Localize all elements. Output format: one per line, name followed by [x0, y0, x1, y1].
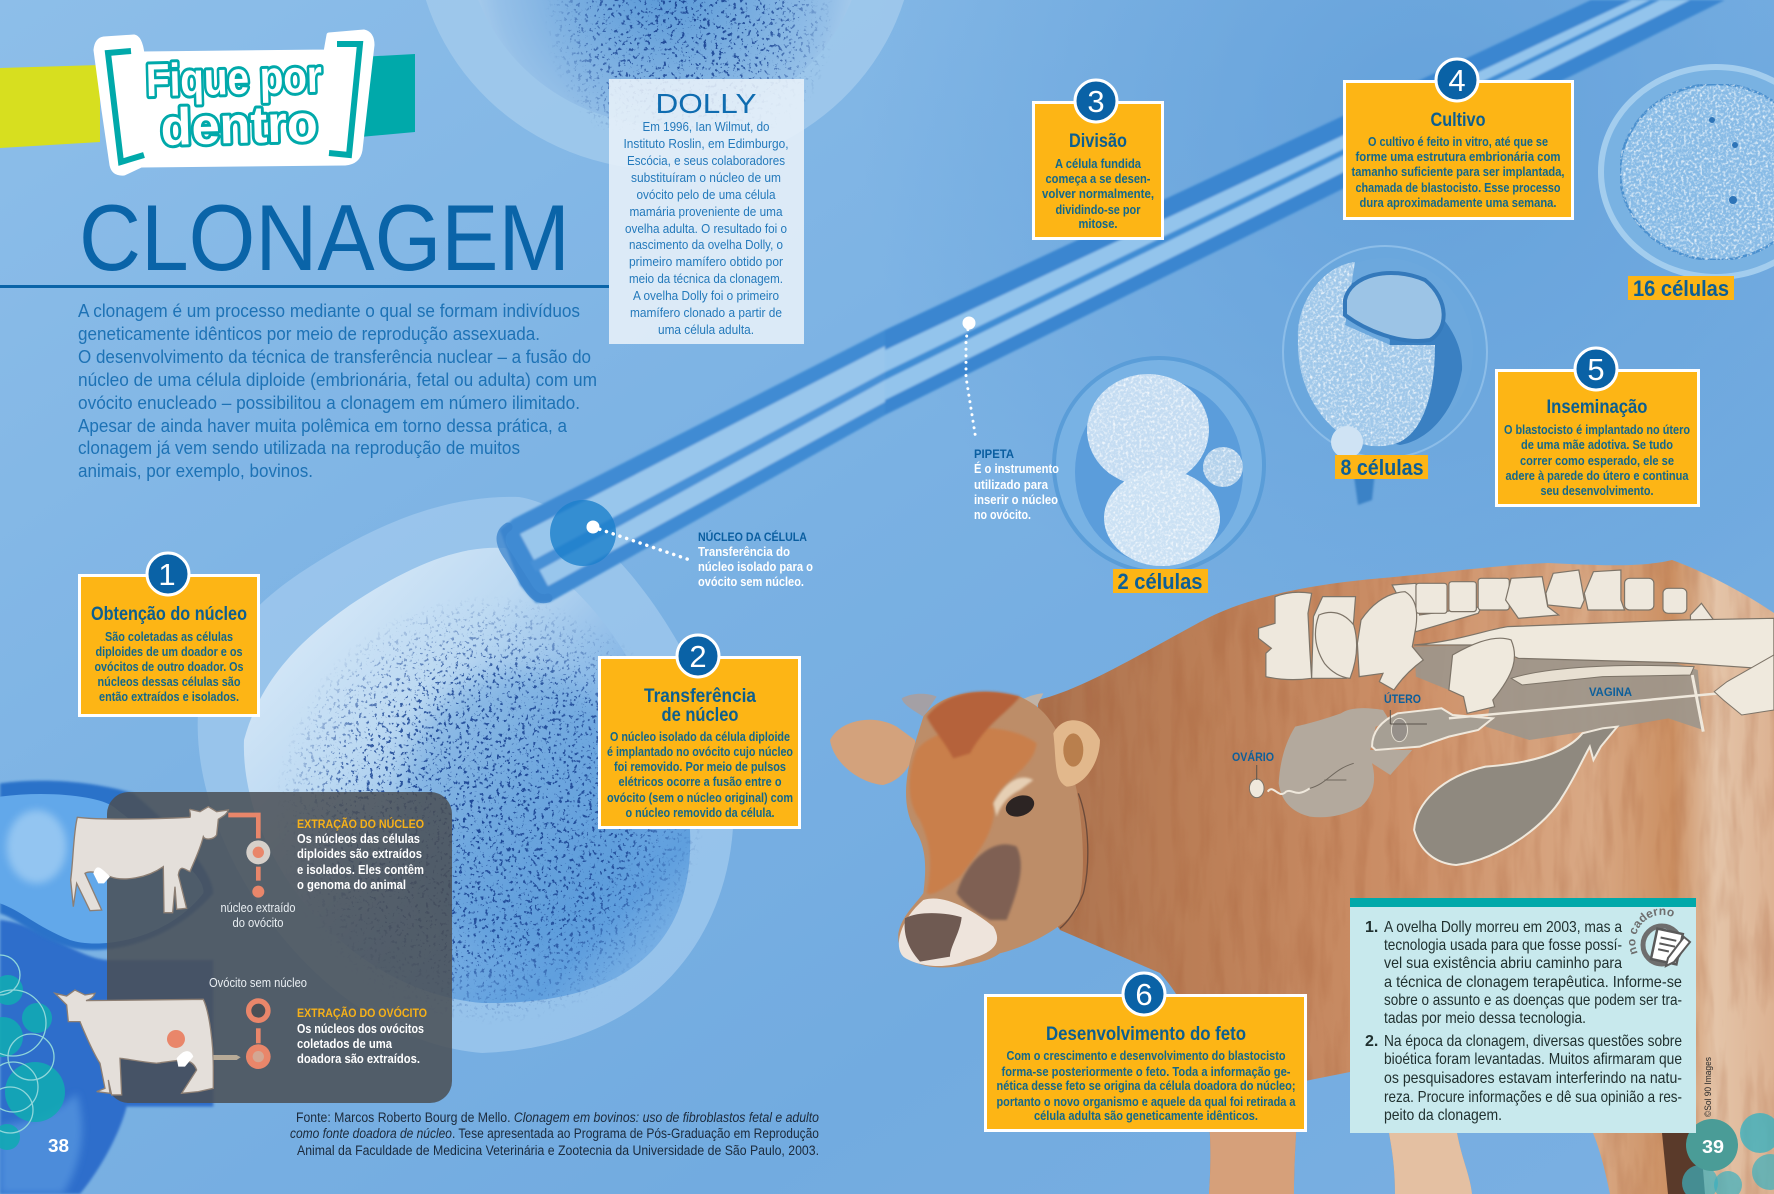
source text: Animal da Faculdade de Medicina Veterinária e Zootecnia da Universidade de São Paulo, 2003. — [297, 1143, 819, 1158]
panel: step 3: 3 — [1087, 84, 1105, 119]
text: extração do núcleo: e isolados. Eles contêm — [297, 862, 424, 877]
question 2: Na época da clonagem, diversas questões sobre — [1384, 1033, 1682, 1050]
cell: 16 células — [1601, 67, 1774, 301]
panel: step 6: portanto o novo organismo e aquele da qual foi retirada a — [996, 1094, 1296, 1109]
callout: núcleo da célula: ovócito sem núcleo. — [698, 574, 804, 589]
photo credit: ©Sol 90 Images — [1703, 1057, 1713, 1117]
panel: Dolly: Escócia, e seus colaboradores — [627, 153, 785, 168]
panel: step 1: núcleos dessas células são — [98, 674, 241, 689]
question 2: bioética foram levantadas. Muitos afirmaram que — [1384, 1051, 1682, 1068]
text: extração do ovócito: coletados de uma — [297, 1036, 393, 1051]
panel: step 2: o núcleo removido da célula. — [626, 805, 774, 820]
cell: 8 células — [1283, 246, 1487, 505]
panel: step 2: ovócito (sem o núcleo original) com — [607, 790, 793, 805]
panel: step 4: chamada de blastocisto. Esse processo — [1356, 180, 1561, 195]
panel: Dolly: primeiro mamífero obtido por — [629, 254, 784, 269]
cow head — [830, 691, 1100, 968]
panel: Dolly: meio da técnica da clonagem. — [629, 271, 783, 286]
panel: step 1: então extraídos e isolados. — [99, 689, 239, 704]
intro text: ovócito enucleado – possibilitou a clonagem em número ilimitado. — [78, 393, 580, 413]
cell: 8 células: 8 células — [1340, 455, 1424, 480]
anatomy labels: OVÁRIO — [1232, 749, 1274, 764]
panel: step 2: de núcleo — [662, 705, 738, 726]
panel: no caderno — [1350, 898, 1696, 1133]
panel: extraction diagram: do ovócito — [232, 916, 284, 930]
intro text: núcleo de uma célula diploide (embrionária, fetal ou adulta) com um — [78, 370, 597, 390]
panel: Dolly: Em 1996, Ian Wilmut, do — [642, 119, 770, 134]
panel: step 5 — [1496, 348, 1698, 506]
callout: pipeta: É o instrumento — [974, 461, 1059, 476]
panel: step 1 — [80, 553, 258, 716]
labels: núcleo extraído — [220, 901, 296, 915]
cow body — [1030, 555, 1774, 1194]
panel: step 2: Transferência — [644, 686, 756, 707]
callout: núcleo da célula — [586, 520, 813, 589]
insemination rod — [1449, 692, 1738, 718]
background: upper egg cell — [415, 0, 915, 170]
panel: step 3: Divisão — [1069, 131, 1127, 152]
panel: step 2 — [600, 635, 800, 828]
panel: step 4 — [1344, 59, 1572, 218]
panel: step 3: mitose. — [1078, 216, 1118, 231]
panel: Dolly: mamária proveniente de uma — [630, 204, 783, 219]
illustration: oocyte donor cow — [55, 990, 271, 1095]
decorative circles and page number 39: 39 — [1702, 1137, 1724, 1157]
bones — [1259, 570, 1716, 690]
callout: pipeta — [962, 316, 1059, 522]
background: blue blob bottom left — [0, 781, 213, 1194]
question 2: os pesquisadores estavam interferindo na natu- — [1384, 1070, 1682, 1087]
title rule — [0, 285, 609, 288]
intro text: A clonagem é um processo mediante o qual se formam indivíduos — [78, 301, 580, 321]
panel: step 3: dividindo-se por — [1056, 202, 1140, 217]
intro text: geneticamente idênticos por meio de reprodução assexuada. — [78, 324, 540, 344]
text: extração do ovócito: Os núcleos dos ovócitos — [297, 1021, 424, 1036]
panel: step 5: de uma mãe adotiva. Se tudo — [1521, 437, 1673, 452]
illustration: donor cow and nucleus extraction — [71, 807, 270, 913]
panel: step 4: forme uma estrutura embrionária com — [1356, 149, 1560, 164]
text: extração do núcleo: o genoma do animal — [297, 877, 406, 892]
cell: 2 células — [1054, 358, 1264, 594]
panel: step 5: 5 — [1587, 352, 1605, 387]
panel: step 6: forma-se posteriormente o feto. Toda a informação ge- — [1002, 1064, 1290, 1079]
panel: step 3: começa a se desen- — [1046, 171, 1150, 186]
panel: extraction diagram — [55, 792, 452, 1103]
question 1: sobre o assunto e as doenças que podem ser tra- — [1384, 992, 1682, 1009]
text: extração do núcleo: diploides são extraídos — [297, 846, 422, 861]
panel: Dolly: nascimento da ovelha Dolly, o — [629, 237, 783, 252]
nucleus in pipette — [550, 500, 616, 566]
callout: pipeta: inserir o núcleo — [974, 492, 1058, 507]
question 2: 2. — [1365, 1033, 1378, 1050]
question 1: tadas por meio dessa tecnologia. — [1384, 1010, 1586, 1027]
uterus — [1279, 708, 1412, 817]
question 1: a técnica de clonagem terapêutica. Informe-se — [1384, 974, 1682, 991]
arm and hand — [1414, 618, 1774, 713]
intro text: Apesar de ainda haver muita polêmica em torno dessa prática, a — [78, 416, 568, 436]
callout: pipeta: PIPETA — [974, 447, 1014, 461]
question 1: A ovelha Dolly morreu em 2003, mas a — [1384, 919, 1622, 936]
panel: Dolly — [609, 79, 804, 344]
panel: step 1: São coletadas as células — [105, 629, 233, 644]
panel: step 5: Inseminação — [1546, 397, 1648, 418]
panel: step 4: dura aproximadamente uma semana. — [1360, 195, 1556, 210]
panel: step 5: correr como esperado, ele se — [1520, 453, 1674, 468]
anatomy labels — [1232, 685, 1632, 764]
question 2: reza. Procure informações e dê sua opinião a res- — [1384, 1089, 1682, 1106]
source text: Fonte: Marcos Roberto Bourg de Mello. Clonagem em bovinos: uso de fibroblastos fetal e adulto — [296, 1110, 819, 1125]
text: extração do ovócito — [297, 1005, 427, 1066]
title banner: Fique por dentro — [0, 32, 415, 173]
icon: notebook: no caderno — [1629, 908, 1674, 954]
panel: Dolly: uma célula adulta. — [658, 322, 754, 337]
panel: Dolly: A ovelha Dolly foi o primeiro — [633, 288, 779, 303]
panel: Dolly: mamífero clonado a partir de — [630, 305, 782, 320]
panel: step 4: O cultivo é feito in vitro, até que se — [1368, 134, 1548, 149]
panel: step 6 — [986, 973, 1306, 1130]
title banner: Fique por dentro: Fique por — [145, 50, 323, 106]
decorative circles and page number 39 — [1682, 1113, 1774, 1194]
main title: CLONAGEM — [79, 185, 570, 290]
panel: step 3: volver normalmente, — [1042, 186, 1154, 201]
panel: step 6: Desenvolvimento do feto — [1046, 1024, 1246, 1045]
vaginal wall — [1511, 665, 1694, 685]
question 2: peito da clonagem. — [1384, 1107, 1502, 1124]
pipette — [500, 0, 1725, 603]
callout: pipeta: utilizado para — [974, 477, 1049, 492]
panel: step 6: 6 — [1135, 977, 1153, 1012]
panel: step 2: 2 — [689, 639, 707, 674]
text: extração do ovócito: EXTRAÇÃO DO OVÓCITO — [297, 1005, 427, 1020]
panel: step 3: A célula fundida — [1055, 156, 1142, 171]
question 1 — [1365, 919, 1682, 1027]
panel: Dolly: DOLLY — [656, 88, 757, 119]
source text: como fonte doadora de núcleo. Tese apresentada ao Programa de Pós-Graduação em Reprodução — [290, 1126, 819, 1141]
callout: núcleo da célula: Transferência do — [698, 544, 790, 559]
intro text: animais, por exemplo, bovinos. — [78, 461, 313, 481]
panel: Dolly: ovelha adulta. O resultado foi o — [625, 221, 787, 236]
panel: step 2: é implantado no ovócito cujo núcleo — [607, 744, 793, 759]
panel: extraction diagram: Ovócito sem núcleo — [209, 976, 307, 990]
intro text: O desenvolvimento da técnica de transferência nuclear – a fusão do — [78, 347, 591, 367]
body cavity — [1414, 645, 1703, 740]
panel: step 6: Com o crescimento e desenvolvimento do blastocisto — [1006, 1048, 1286, 1063]
text: extração do núcleo — [297, 816, 424, 892]
source text — [290, 1110, 819, 1158]
intro text — [78, 301, 597, 481]
panel: step 1: diploides de um doador e os — [96, 644, 242, 659]
panel: step 3 — [1034, 80, 1162, 238]
page number 38: 38 — [48, 1136, 69, 1156]
panel: step 4: tamanho suficiente para ser implantada, — [1352, 164, 1564, 179]
callout: pipeta: no ovócito. — [974, 507, 1031, 522]
anatomy overlay — [1249, 570, 1774, 865]
panel: step 5: adere à parede do útero e continua — [1506, 468, 1689, 483]
panel: step 2: elétricos ocorre a fusão entre o — [618, 774, 782, 789]
cell: 2 células: 2 células — [1118, 569, 1202, 594]
right hand — [1714, 655, 1774, 715]
panel: step 5: O blastocisto é implantado no útero — [1504, 422, 1690, 437]
ovary — [1249, 779, 1264, 798]
text: extração do núcleo: EXTRAÇÃO DO NÚCLEO — [297, 816, 424, 831]
question 1: tecnologia usada para que fosse possí- — [1384, 937, 1622, 954]
icon: notebook — [1629, 908, 1692, 968]
callout: núcleo da célula: núcleo isolado para o — [698, 559, 813, 574]
panel: Dolly: ovócito pelo de uma célula — [636, 187, 776, 202]
callout: núcleo da célula: NÚCLEO DA CÉLULA — [698, 529, 807, 544]
question 1: vel sua existência abriu caminho para — [1384, 955, 1622, 972]
decorative circles bottom left — [0, 955, 65, 1150]
panel: Dolly: substituíram o núcleo de um — [631, 170, 781, 185]
bladder — [1414, 727, 1617, 865]
question 1: 1. — [1365, 919, 1378, 936]
panel: step 1: 1 — [158, 557, 176, 592]
anatomy labels: ÚTERO — [1384, 691, 1421, 706]
background: lower egg cell — [198, 497, 750, 1053]
panel: step 6: célula adulta são geneticamente idênticos. — [1034, 1108, 1258, 1123]
text: extração do ovócito: doadora são extraídos. — [297, 1051, 420, 1066]
panel: step 2: O núcleo isolado da célula diploide — [610, 729, 790, 744]
panel: step 4: 4 — [1448, 63, 1466, 98]
title banner: Fique por dentro: dentro — [160, 95, 318, 157]
panel: step 4: Cultivo — [1430, 110, 1486, 131]
panel: step 1: Obtenção do núcleo — [91, 604, 247, 625]
text: extração do núcleo: Os núcleos das células — [297, 831, 420, 846]
panel: step 2: foi removido. Por meio de pulsos — [614, 759, 786, 774]
panel: step 5: seu desenvolvimento. — [1540, 483, 1654, 498]
panel: step 1: ovócitos de outro doador. Os — [94, 659, 244, 674]
cell: 16 células: 16 células — [1633, 276, 1729, 301]
panel: Dolly: Instituto Roslin, em Edimburgo, — [624, 136, 788, 151]
panel: step 6: nética desse feto se origina da célula doadora do núcleo; — [996, 1078, 1296, 1093]
anatomy labels: VAGINA — [1589, 685, 1632, 699]
question 2 — [1365, 1033, 1682, 1124]
intro text: clonagem já vem sendo utilizada na reprodução de muitos — [78, 438, 520, 458]
